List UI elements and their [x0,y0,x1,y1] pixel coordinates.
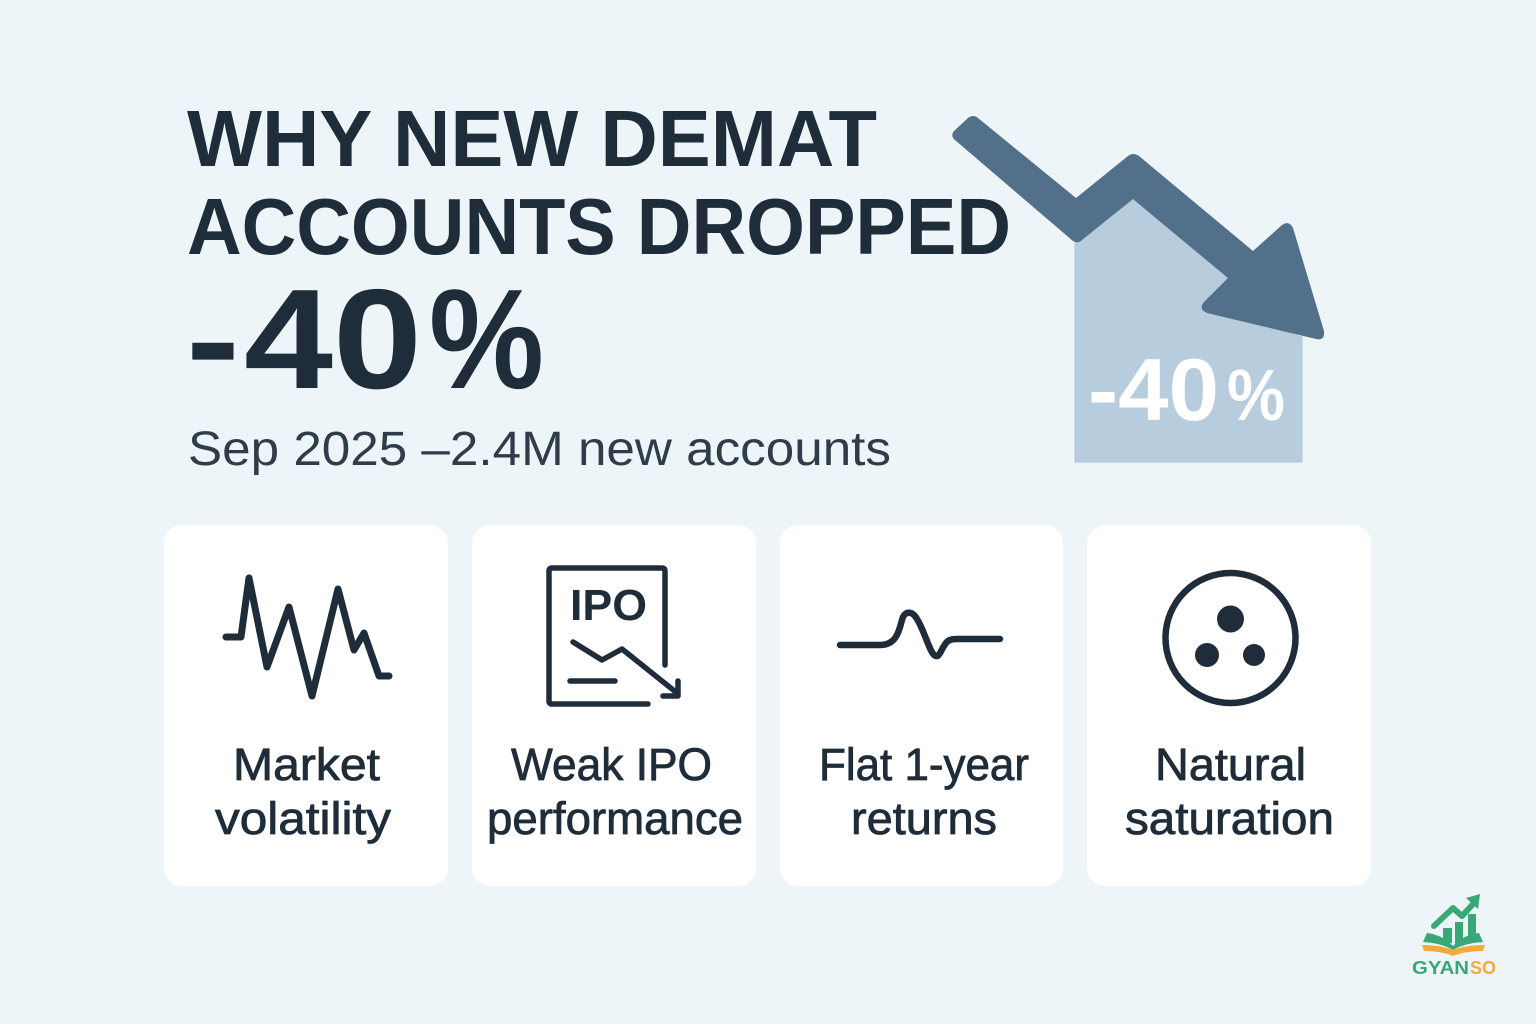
headline figure: -40%: 40 [244,260,422,419]
title: ACCOUNTS DROPPED [187,182,1011,271]
logo icon: rising arrow, bars and open book [1422,894,1485,956]
label: returns [851,793,997,844]
logo wordmark: SO [1470,958,1496,978]
label: performance [487,793,743,844]
shaded block [1075,199,1302,462]
logo wordmark: GYAN [1412,958,1469,978]
headline figure: -40% [186,260,544,419]
logo: GYANSO [1412,894,1496,978]
icon: circle with three dots [1166,573,1296,703]
label: Flat 1-year [819,739,1029,790]
block label: % [1227,356,1285,436]
panel: natural saturation [1087,525,1371,886]
headline figure: -40%: - [186,260,240,419]
icon: IPO document with falling line [549,568,678,704]
panel: weak IPO performance [472,525,756,886]
label [215,739,392,844]
arrow [952,116,1324,339]
panel: flat 1-year returns [780,525,1063,886]
headline figure: -40%: % [429,260,544,419]
panel: market volatility [164,525,448,886]
label: Natural [1155,739,1306,790]
label [819,739,1029,844]
label: Weak IPO [511,739,712,790]
icon: volatile line [226,578,389,696]
chart: falling arrow over shaded block [952,116,1324,462]
icon: flat line with small blip [840,613,1000,656]
title: WHY NEW DEMAT [187,94,877,183]
label [1125,739,1334,844]
label [487,739,743,844]
block label: -40 [1088,340,1219,439]
subtitle: Sep 2025 –2.4M new accounts [188,423,891,476]
block label [1088,340,1285,439]
logo wordmark [1412,958,1496,978]
title [187,94,1011,271]
icon: IPO document with falling line: IPO [570,581,647,630]
label: Market [233,739,381,790]
label: saturation [1125,793,1334,844]
label: volatility [215,793,392,844]
